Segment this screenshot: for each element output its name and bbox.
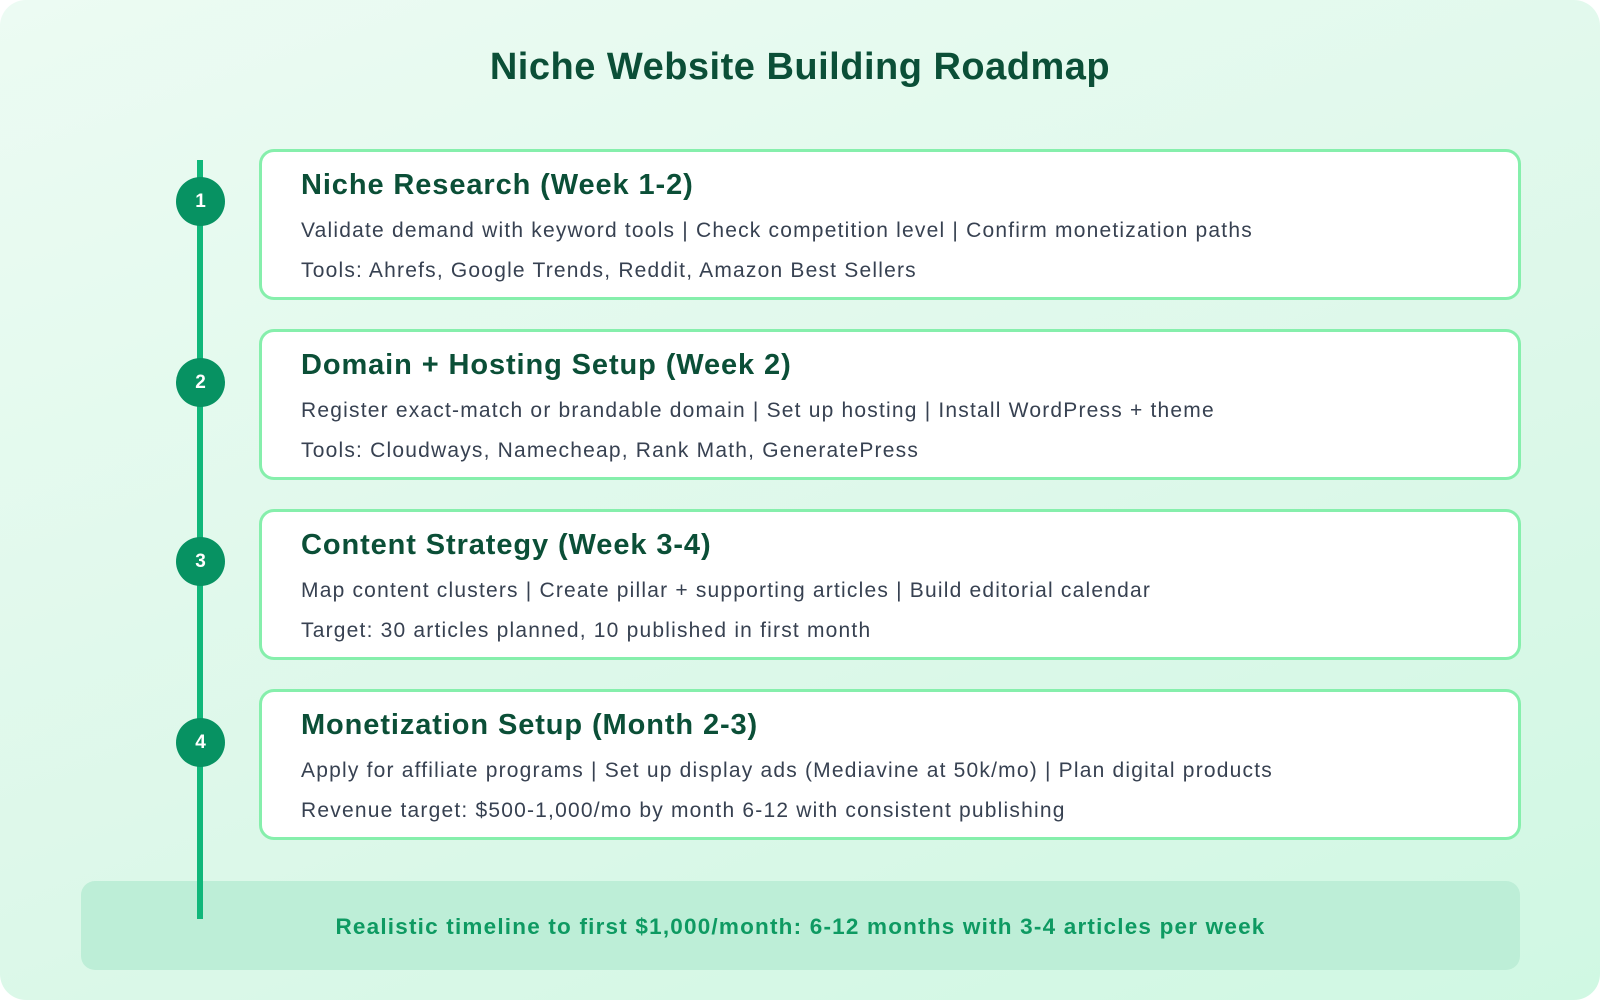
panel: niche research: Niche Research (Week 1-2)	[301, 169, 694, 201]
timeline line	[197, 160, 203, 919]
footer callout: Realistic timeline to first $1,000/month: 6-12 months with 3-4 articles per week	[335, 914, 1266, 939]
panel: content strategy: Map content clusters | Create pillar + supporting articles | Build editorial calendar	[301, 579, 1151, 602]
step marker 4	[176, 718, 225, 767]
step marker 3	[176, 537, 225, 586]
panel: domain hosting	[259, 329, 1521, 480]
panel: monetization	[259, 689, 1521, 840]
step marker 1: 1	[195, 191, 206, 212]
panel: niche research: Tools: Ahrefs, Google Trends, Reddit, Amazon Best Sellers	[301, 259, 917, 282]
panel: monetization: Apply for affiliate programs | Set up display ads (Mediavine at 50k/mo) | Plan digital products	[301, 759, 1273, 782]
step marker 4: 4	[195, 732, 206, 753]
panel: content strategy: Target: 30 articles planned, 10 published in first month	[301, 619, 871, 642]
panel: domain hosting: Domain + Hosting Setup (Week 2)	[301, 349, 792, 381]
step marker 1	[176, 177, 225, 226]
panel: monetization: Monetization Setup (Month 2-3)	[301, 709, 758, 741]
panel: monetization: Revenue target: $500-1,000/mo by month 6-12 with consistent publishing	[301, 799, 1066, 822]
step marker 2	[176, 358, 225, 407]
title: Niche Website Building Roadmap	[490, 46, 1110, 88]
panel: niche research: Validate demand with keyword tools | Check competition level | Confirm monetization paths	[301, 219, 1253, 242]
panel: domain hosting: Register exact-match or brandable domain | Set up hosting | Install WordPress + theme	[301, 399, 1215, 422]
panel: content strategy	[259, 509, 1521, 660]
panel: content strategy: Content Strategy (Week 3-4)	[301, 529, 712, 561]
step marker 2: 2	[195, 372, 206, 393]
footer callout	[81, 881, 1520, 970]
panel: domain hosting: Tools: Cloudways, Namecheap, Rank Math, GeneratePress	[301, 439, 919, 462]
panel: niche research	[259, 149, 1521, 300]
step marker 3: 3	[195, 551, 206, 572]
